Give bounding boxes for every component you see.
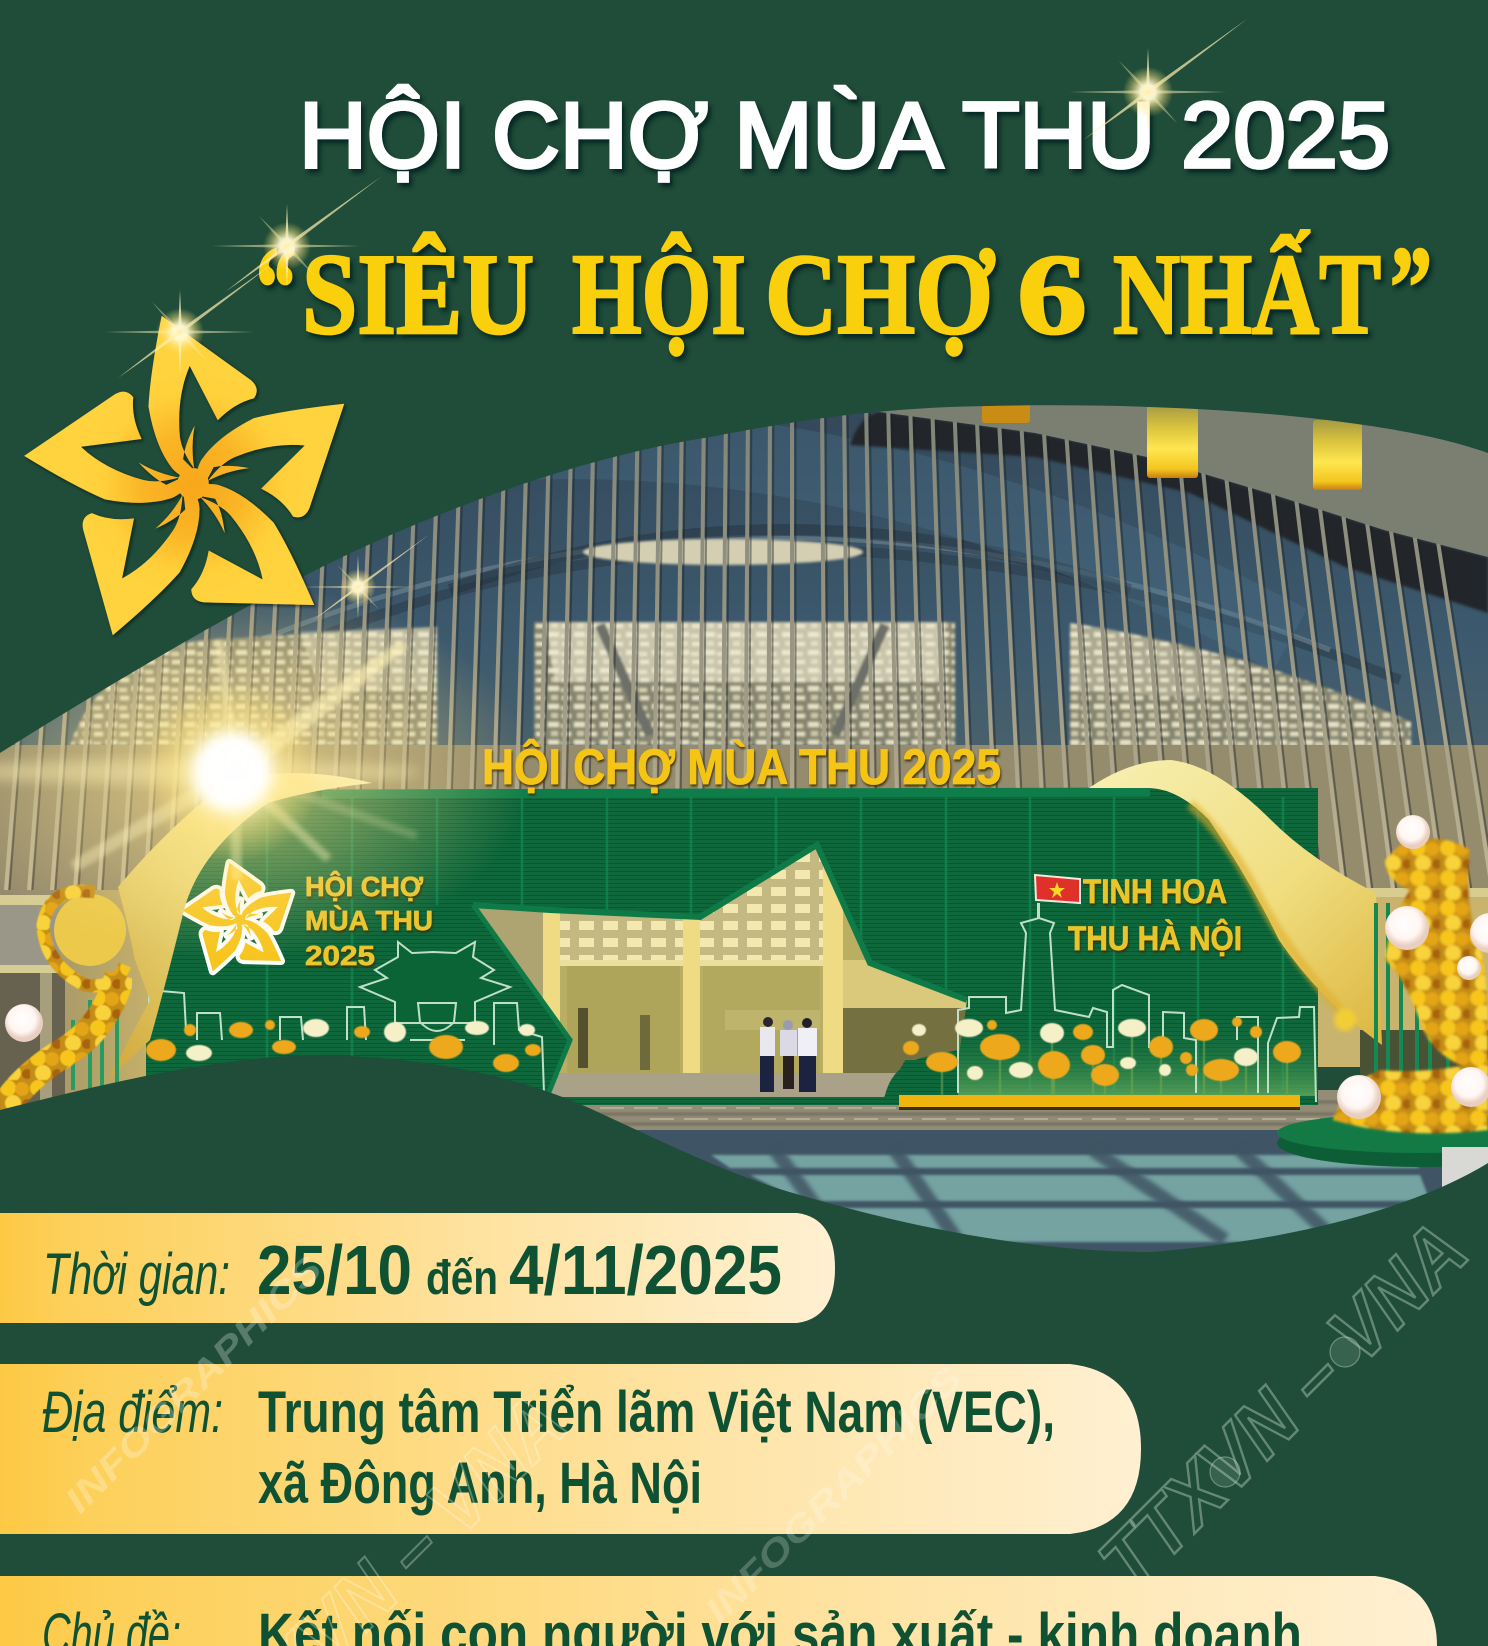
date range: đến — [426, 1252, 498, 1305]
subtitle — [256, 224, 1432, 358]
large lens flare — [0, 582, 532, 962]
pill: venue — [0, 1364, 1141, 1534]
left marigold decoration — [0, 891, 126, 1115]
right flower tree — [1277, 815, 1488, 1187]
wall sign right — [1068, 873, 1242, 958]
sparkle: title — [1069, 19, 1248, 140]
sparkle: subtitle quote — [212, 176, 382, 292]
flowers left bed — [146, 1019, 541, 1072]
subtitle: HỘI — [572, 231, 746, 358]
wall sign right: THU HÀ NỘI — [1068, 919, 1242, 958]
wall sign right: TINH HOA — [1083, 873, 1227, 911]
flowers right bed — [903, 1017, 1301, 1095]
round planter — [1277, 1138, 1442, 1167]
vertical facade slats — [0, 400, 1488, 890]
right golden ribbon — [1089, 760, 1382, 1045]
city skyline outline left — [149, 990, 544, 1093]
left golden ribbon — [108, 773, 372, 1080]
label: time: Thời gian: — [43, 1242, 230, 1307]
small flower logo on wall — [181, 863, 301, 979]
subtitle: NHẤT — [1113, 231, 1381, 358]
dark ceiling beam — [850, 412, 1488, 613]
watermark: infographics centre: INFOGRAPHICS — [697, 1358, 970, 1631]
exhibition centre photo — [0, 395, 1488, 1260]
subtitle: ” — [1390, 224, 1432, 351]
green gate wall — [146, 788, 1318, 1105]
skylight lattice patches — [70, 539, 1411, 748]
entrance steps — [582, 1090, 1488, 1130]
subtitle: CHỢ — [765, 231, 995, 358]
pill: time — [0, 1213, 835, 1323]
gold five-petal flower logo — [20, 316, 373, 659]
pill: theme — [0, 1576, 1437, 1646]
sparkle: flower tip — [105, 262, 275, 378]
sparkle: photo edge — [302, 534, 429, 622]
date range: 4/11/2025 — [509, 1231, 782, 1309]
watermark: infographics left: INFOGRAPHICS — [57, 1248, 330, 1521]
venue text: Trung tâm Triển lãm Việt Nam (VEC), — [258, 1380, 1055, 1445]
central doorway opening — [470, 845, 973, 1100]
city skyline outline right — [958, 918, 1316, 1102]
venue text: xã Đông Anh, Hà Nội — [258, 1451, 702, 1516]
Vietnam flag — [1035, 875, 1080, 919]
floor with teal tiles — [637, 1130, 1442, 1252]
title: HỘI CHỢ MÙA THU 2025 — [299, 83, 1390, 187]
subtitle: “ — [256, 224, 296, 351]
subtitle: SIÊU — [302, 231, 534, 358]
subtitle: 6 — [1017, 231, 1087, 358]
date range — [257, 1231, 782, 1309]
yellow plinth — [899, 1095, 1300, 1107]
visitors at the door — [760, 1017, 817, 1092]
side walls behind the gate — [0, 888, 1488, 1113]
venue text — [258, 1380, 1055, 1516]
grey ceiling — [878, 405, 1488, 557]
wall sign left: HỘI CHỢ — [305, 870, 423, 902]
hanging lanterns — [982, 405, 1362, 490]
wall sign left — [305, 870, 433, 971]
label: venue: Địa điểm: — [42, 1380, 223, 1445]
right flower bed base — [884, 1034, 1315, 1110]
wall sign left: 2025 — [305, 940, 375, 971]
gold sign above gate: HỘI CHỢ MÙA THU 2025 — [482, 738, 1001, 795]
date range: 25/10 — [257, 1231, 412, 1309]
temple gate outline — [360, 942, 510, 1040]
wall sign left: MÙA THU — [305, 905, 433, 936]
